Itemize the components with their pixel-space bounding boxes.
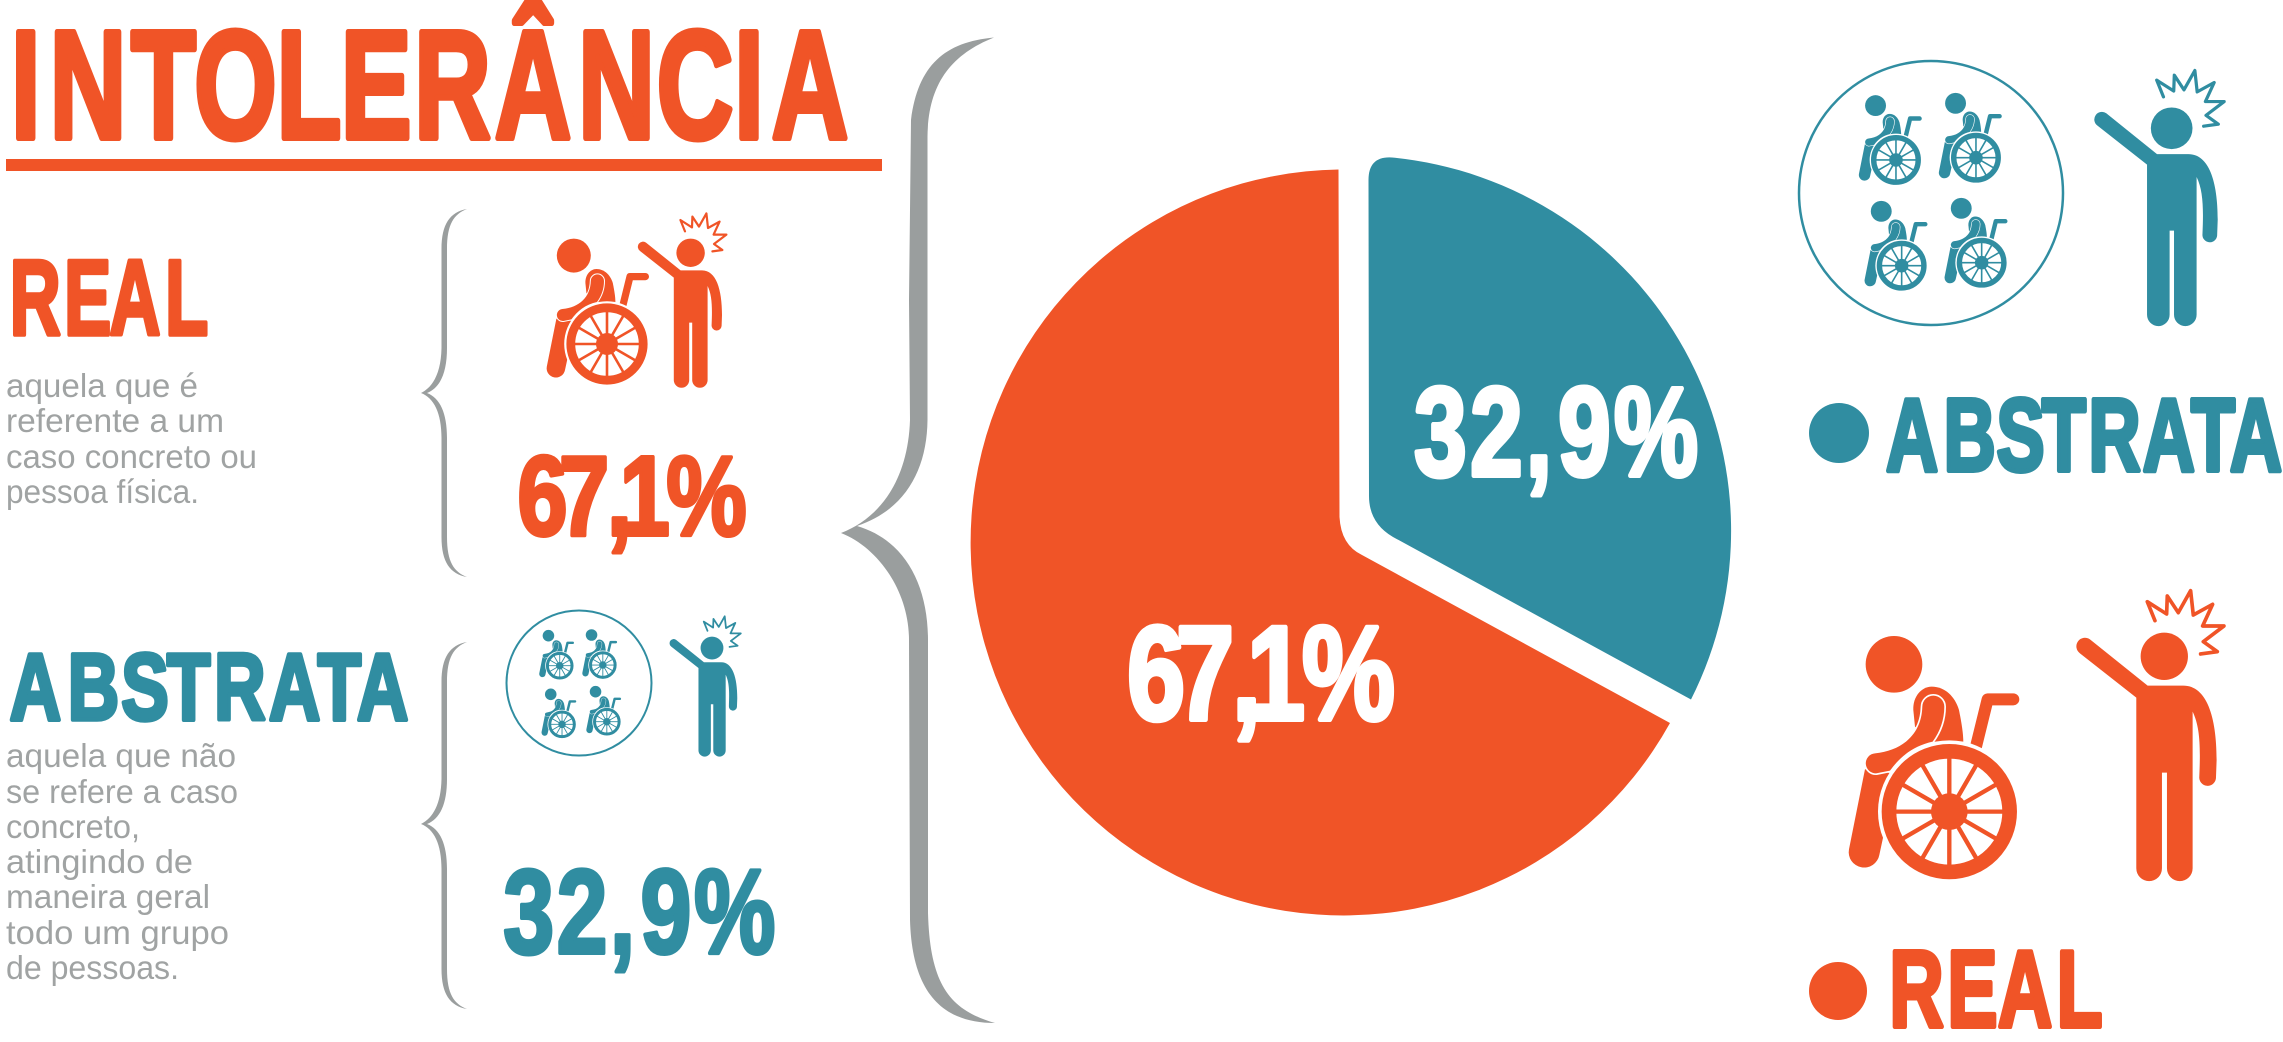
pie chart — [971, 157, 1731, 915]
legend: real — [1809, 591, 2224, 1042]
title underline — [6, 159, 882, 171]
percentage: abstrata: 32,9% — [503, 844, 775, 979]
icon: wheelchair user — [547, 239, 650, 387]
legend dot — [1809, 962, 1867, 1020]
icon: wheelchair user — [1849, 636, 2021, 883]
slice label: abstrata: 32,9% — [1414, 361, 1698, 503]
brace: large — [841, 38, 995, 1023]
icon: person hit — [2076, 591, 2224, 881]
slice: abstrata — [1368, 157, 1731, 700]
slice label: real: 67,1% — [1127, 599, 1395, 748]
heading: real: REAL — [10, 239, 208, 358]
text: abstrata definition: se refere a caso — [6, 773, 238, 810]
icon: group circle — [506, 610, 652, 756]
text: abstrata definition: todo um grupo — [6, 914, 229, 951]
percentage: real: 67,1% — [517, 432, 747, 559]
icon: group circle — [1799, 61, 2063, 325]
text: real definition: pessoa física. — [6, 473, 199, 510]
panel: abstrata — [6, 610, 775, 1009]
slice: real — [971, 170, 1670, 915]
text: real definition: caso concreto ou — [6, 438, 257, 475]
text: real definition: aquela que é — [6, 367, 198, 404]
text: real definition: referente a um — [6, 402, 224, 439]
legend label: ABSTRATA — [1886, 378, 2282, 493]
text: abstrata definition: aquela que não — [6, 737, 236, 774]
brace: real — [421, 209, 467, 577]
title: INTOLERÂNCIA — [11, 0, 848, 172]
text: real definition — [6, 367, 257, 510]
legend: abstrata — [1799, 61, 2282, 493]
text: abstrata definition: atingindo de — [6, 843, 193, 880]
icon: person hit — [638, 213, 726, 388]
text: abstrata definition: de pessoas. — [6, 949, 179, 986]
icon: person hit — [670, 616, 741, 757]
text: abstrata definition: concreto, — [6, 808, 140, 845]
text: abstrata definition — [6, 737, 238, 986]
text: abstrata definition: maneira geral — [6, 878, 210, 915]
icon: person hit — [2094, 70, 2224, 326]
heading: abstrata: ABSTRATA — [10, 634, 408, 740]
legend dot — [1809, 403, 1869, 463]
brace: abstrata — [421, 642, 467, 1009]
panel: real — [6, 209, 747, 577]
